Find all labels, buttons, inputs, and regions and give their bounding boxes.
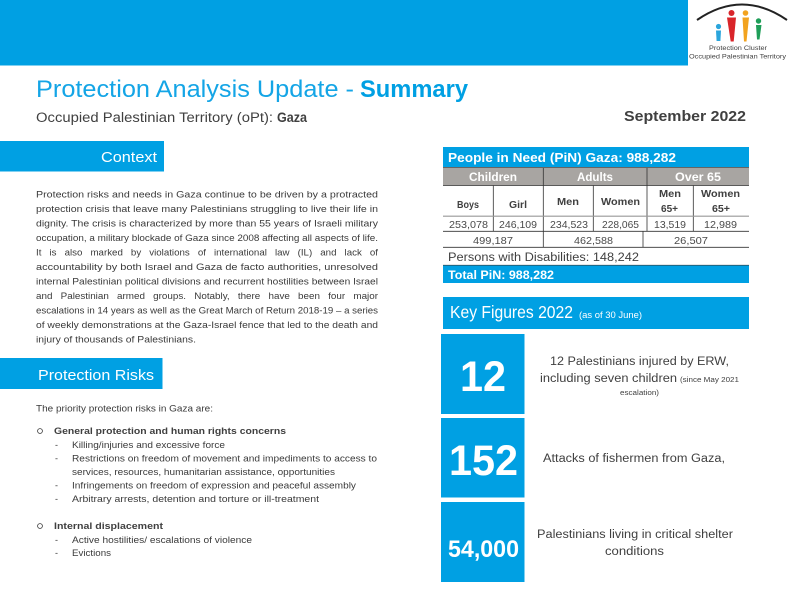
table header row [443,168,749,186]
table header row: Children [469,170,517,184]
risk group: general protection: Killing/injuries and excessive force [72,440,225,450]
total PiN bar [443,266,749,283]
heading: Context [0,141,164,172]
table subtotals row: 499,187 [473,235,513,247]
table subtotals row: 26,507 [674,235,708,247]
key figure: 12: escalation) [620,390,659,397]
table subheader row: Women [701,189,740,200]
risk group: general protection [38,426,377,504]
key figure: 12: 12 [460,353,506,401]
table subheader row: Women [601,197,640,208]
subtitle: Gaza [277,110,307,125]
risk group: internal displacement: Internal displacement [54,521,164,532]
risk group: general protection: Arbitrary arrests, detention and torture or ill-treatment [72,494,320,504]
table values row: 228,065 [602,219,639,231]
table subheader row: Boys [457,200,479,211]
table values row: 234,523 [550,219,588,231]
risk group: internal displacement [38,521,252,558]
protection risks intro: The priority protection risks in Gaza are: [36,404,213,414]
table values row: 12,989 [704,219,737,231]
title: Protection Analysis Update - [36,76,354,103]
table subheader row [457,189,740,215]
context paragraph: escalations in 14 years as well as the Great March of Return 2018-19 – a series [36,306,379,316]
table header row: Adults [577,170,613,184]
heading: Protection Risks [0,358,162,389]
key figure: 54,000: Palestinians living in critical shelter [537,529,733,541]
context paragraph: and Palestinian armed groups. Notably, there have been four major [36,291,378,301]
heading: Context: Context [101,149,158,166]
key figure: 12 [441,334,739,414]
context paragraph: protection crisis that leave many Palestinians struggling to live their life in [36,204,378,214]
key figure: 54,000: 54,000 [448,536,519,563]
table values row: 246,109 [499,219,537,231]
heading: Protection Risks: Protection Risks [38,367,154,384]
persons with disabilities: Persons with Disabilities: 148,242 [448,252,639,264]
header band [0,0,688,66]
context paragraph: of weekly demonstrations at the Gaza-Israel fence that led to the death and [36,320,378,330]
table subheader row: 65+ [712,204,730,215]
logo: Protection Cluster: Protection Cluster [709,45,768,52]
table values row [449,219,737,231]
key figure: 12: (since May 2021 [680,377,739,384]
context paragraph: internal Palestinian political divisions and recurrent hostilities between Israel [36,277,378,287]
risk group: internal displacement: Evictions [72,548,112,558]
subtitle: Occupied Palestinian Territory (oPt): [36,110,273,125]
risk group: internal displacement: Active hostilities/ escalations of violence [72,535,252,545]
context paragraph [36,190,379,345]
risk group: general protection: - [55,454,58,464]
total PiN bar: Total PiN: 988,282 [448,270,554,282]
risk group: general protection: - [55,494,58,504]
table subtotals row: 462,588 [574,235,613,247]
table subheader row: Men [659,189,681,200]
context paragraph: occupation, a military blockade of Gaza since 2008 affecting all aspects of life. [36,233,378,243]
risk group: internal displacement: - [55,548,58,558]
context paragraph: dignity. The crisis is characterized by more than 55 years of Israeli military [36,219,379,229]
logo: Protection Cluster [689,4,787,60]
key figure: 152: 152 [449,437,518,485]
context paragraph: Protection risks and needs in Gaza continue to be driven by a protracted [36,190,378,200]
title: Summary [360,76,469,103]
risk group: internal displacement: - [55,535,58,545]
table title bar: People in Need (PiN) Gaza: 988,282 [448,150,676,165]
risk group: general protection: - [55,440,58,450]
key figure: 152 [441,418,725,498]
context paragraph: injury of thousands of Palestinians. [36,335,196,345]
risk group: general protection: Infringements on freedom of expression and peaceful assembly [72,480,357,490]
title [36,76,469,103]
key figure: 12: including seven children [540,373,677,385]
risk group: general protection: Restrictions on freedom of movement and impediments to access to [72,454,377,464]
table grid lines [443,168,749,265]
context paragraph: accountability by both Israel and Gaza de facto authorities, unresolved [36,262,378,272]
table subheader row: Men [557,197,579,208]
risk group: general protection: General protection and human rights concerns [54,426,286,437]
context paragraph: It is also marked by violations of international law (IL) and lack of [36,248,379,258]
heading: Key Figures: (as of 30 June) [579,310,642,321]
key figure: 152: Attacks of fishermen from Gaza, [543,453,725,465]
table values row: 13,519 [654,219,686,231]
key figure: 12: 12 Palestinians injured by ERW, [550,356,729,368]
table title bar [443,147,749,167]
table values row: 253,078 [449,219,488,231]
date: September 2022 [624,108,746,125]
table subheader row: 65+ [661,204,678,215]
heading: Key Figures: Key Figures 2022 [450,302,573,322]
heading: Key Figures [443,297,749,329]
table header row: Over 65 [675,170,721,184]
key figure: 54,000: conditions [605,546,664,558]
risk group: general protection: - [55,480,58,490]
logo: Protection Cluster: Occupied Palestinian Territory [689,54,787,60]
table subheader row: Girl [509,200,527,211]
table: people in need [443,147,749,283]
key figure: 54,000 [441,502,733,582]
risk group: general protection: services, resources, humanitarian assistance, opportunities [72,467,336,477]
table subtotals row [473,235,708,247]
